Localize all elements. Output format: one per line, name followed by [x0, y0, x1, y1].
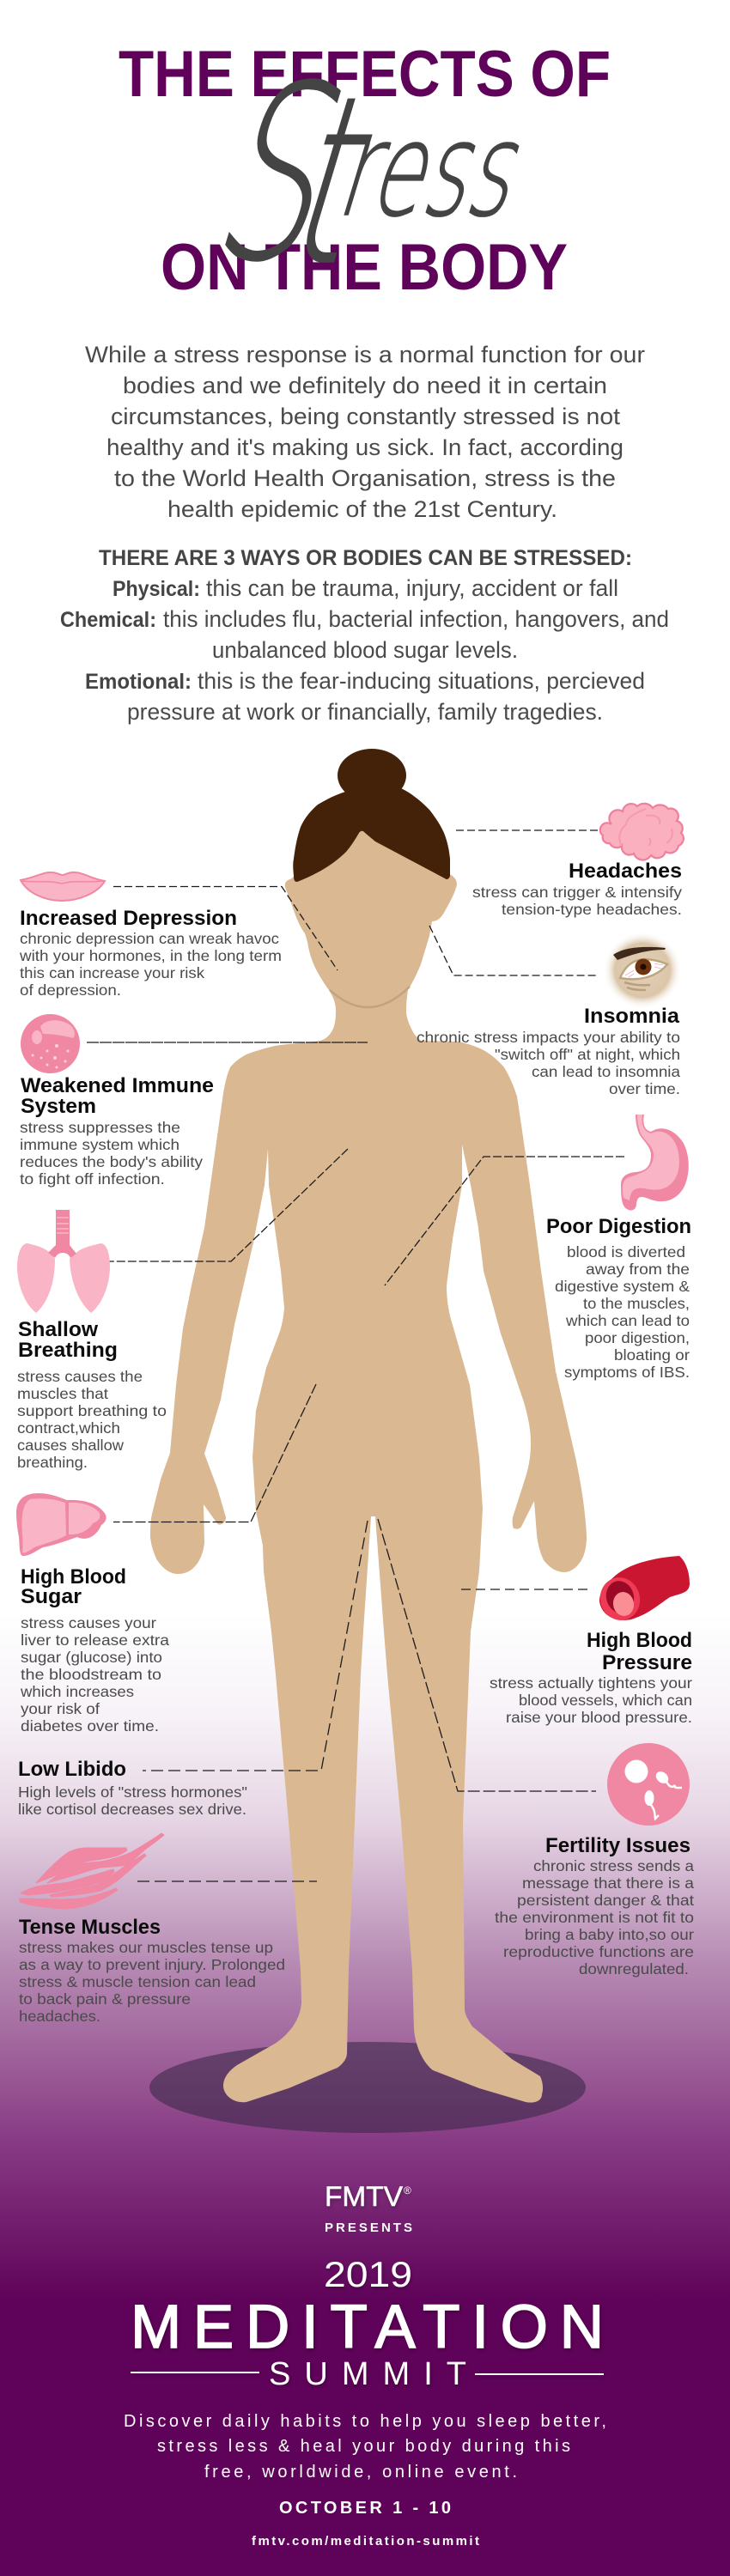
description: blood is diverted [567, 1243, 685, 1261]
title: ress [325, 95, 542, 246]
FMTV logo: FMTV [325, 2181, 404, 2212]
description: like cortisol decreases sex drive. [18, 1801, 246, 1818]
three ways of stress: this includes flu, bacterial infection, hangovers, and [163, 606, 669, 632]
description: digestive system & [555, 1278, 690, 1295]
intro paragraph [85, 342, 645, 522]
icon: lips [21, 872, 105, 901]
description: contract,which [17, 1419, 120, 1437]
description: stress can trigger & intensify [472, 884, 682, 901]
panel: low libido [18, 1758, 247, 1818]
panel: tense muscles [19, 1833, 285, 2025]
description [20, 1119, 203, 1188]
intro paragraph: circumstances, being constantly stressed is not [111, 404, 621, 429]
description: liver to release extra [21, 1631, 169, 1649]
hair [293, 749, 450, 882]
description: stress causes your [21, 1614, 156, 1631]
intro paragraph: health epidemic of the 21st Century. [167, 496, 557, 522]
heading [18, 1318, 118, 1362]
event description [124, 2412, 606, 2482]
description: stress causes the [17, 1368, 143, 1385]
panel: fertility issues [495, 1743, 694, 1978]
website url: fmtv.com/meditation-summit [252, 2534, 479, 2549]
description: sugar (glucose) into [21, 1649, 162, 1666]
description: the environment is not fit to [495, 1909, 694, 1926]
heading: Headaches [569, 860, 682, 883]
heading: Fertility Issues [545, 1834, 690, 1857]
title [119, 35, 611, 317]
summit logo: SUMMIT [269, 2356, 466, 2392]
icon: lungs [17, 1210, 110, 1313]
description: bloating or [614, 1346, 690, 1364]
description: headaches. [19, 2008, 100, 2025]
description: downregulated. [579, 1960, 689, 1978]
icon: brain [600, 804, 684, 860]
heading: Shallow [18, 1318, 98, 1341]
description: support breathing to [17, 1402, 167, 1419]
icon: immune cell [21, 1014, 80, 1073]
icon: egg and sperm [607, 1743, 690, 1826]
heading [21, 1074, 214, 1118]
dashed leader lines [87, 830, 624, 1881]
description: away from the [586, 1261, 690, 1278]
icon: artery [595, 1556, 690, 1625]
description: reproductive functions are [503, 1943, 694, 1960]
description [555, 1243, 690, 1381]
intro paragraph: While a stress response is a normal function for our [85, 342, 645, 368]
presents: PRESENTS [325, 2221, 412, 2235]
heading: Increased Depression [20, 907, 237, 930]
three ways of stress: this is the fear-inducing situations, percieved [198, 668, 645, 694]
description: stress & muscle tension can lead [19, 1973, 256, 1990]
description: over time. [609, 1080, 680, 1097]
panel: meditation summit promo [124, 2181, 606, 2549]
panel: high blood pressure [490, 1556, 692, 1726]
heading: High Blood [21, 1565, 126, 1589]
three ways of stress: THERE ARE 3 WAYS OR BODIES CAN BE STRESSED: [99, 546, 632, 570]
heading: Sugar [21, 1585, 82, 1608]
intro paragraph: bodies and we definitely do need it in certain [123, 373, 607, 398]
description: stress suppresses the [20, 1119, 180, 1136]
event description: stress less & heal your body during this [157, 2437, 570, 2456]
heading: Weakened Immune [21, 1074, 214, 1097]
description: blood vessels, which can [519, 1692, 692, 1709]
description [417, 1029, 680, 1097]
icon: eye [603, 932, 682, 1009]
description: stress actually tightens your [490, 1674, 692, 1692]
summit logo: 2019 [324, 2254, 412, 2294]
panel: insomnia [417, 932, 682, 1097]
three ways of stress: this can be trauma, injury, accident or fall [206, 575, 618, 601]
heading: Low Libido [18, 1758, 126, 1781]
panel: shallow breathing [17, 1210, 167, 1471]
description [20, 1614, 169, 1735]
intro paragraph: healthy and it's making us sick. In fact, according [106, 434, 624, 460]
three ways of stress: Chemical: [60, 608, 156, 632]
icon: liver [16, 1493, 106, 1556]
icon: stomach [621, 1115, 689, 1211]
description: which can lead to [565, 1312, 690, 1329]
title: THE EFFECTS OF [119, 38, 611, 111]
description: raise your blood pressure. [506, 1709, 692, 1726]
description: to the muscles, [583, 1295, 690, 1312]
description: breathing. [17, 1454, 88, 1471]
description: chronic stress sends a [533, 1857, 694, 1874]
description: High levels of "stress hormones" [18, 1783, 247, 1801]
description: chronic depression can wreak havoc [20, 930, 279, 947]
body figure [150, 824, 587, 2103]
panel: weakened immune system [20, 1014, 214, 1188]
description: tension-type headaches. [502, 901, 682, 918]
three ways of stress: unbalanced blood sugar levels. [212, 637, 518, 663]
title: S [191, 35, 374, 315]
description: to back pain & pressure [19, 1990, 191, 2008]
description [472, 884, 682, 918]
description: "switch off" at night, which [495, 1046, 680, 1063]
description: this can increase your risk [20, 964, 204, 981]
description: of depression. [20, 981, 121, 999]
description: diabetes over time. [21, 1717, 159, 1735]
event description: free, worldwide, online event. [204, 2463, 517, 2482]
description: reduces the body's ability [20, 1153, 203, 1170]
description: your risk of [21, 1700, 100, 1717]
description: as a way to prevent injury. Prolonged [19, 1956, 285, 1973]
panel: headaches [472, 804, 684, 918]
summit logo [131, 2254, 604, 2392]
three ways of stress [60, 546, 669, 725]
description: muscles that [17, 1385, 108, 1402]
title: t [265, 47, 405, 317]
heading: System [21, 1095, 96, 1118]
event description: Discover daily habits to help you sleep better, [124, 2412, 606, 2431]
description: the bloodstream to [21, 1666, 161, 1683]
heading: Insomnia [584, 1005, 680, 1028]
description: persistent danger & that [517, 1892, 694, 1909]
heading [587, 1629, 692, 1674]
heading: Breathing [18, 1339, 118, 1362]
heading: Pressure [602, 1651, 692, 1674]
description: message that there is a [522, 1874, 694, 1892]
description: symptoms of IBS. [564, 1364, 690, 1381]
event date: OCTOBER 1 - 10 [279, 2499, 451, 2518]
description: bring a baby into,so our [525, 1926, 694, 1943]
description: poor digestion, [585, 1329, 690, 1346]
three ways of stress: pressure at work or financially, family tragedies. [127, 699, 603, 725]
heading: Tense Muscles [19, 1916, 161, 1939]
description: chronic stress impacts your ability to [417, 1029, 680, 1046]
heading: Poor Digestion [546, 1215, 691, 1238]
heading [21, 1565, 126, 1608]
panel: increased depression [19, 872, 282, 999]
description [17, 1368, 167, 1471]
description [19, 1939, 285, 2025]
three ways of stress: Emotional: [85, 670, 192, 694]
panel: high blood sugar [16, 1493, 169, 1735]
title: ON THE BODY [161, 231, 568, 304]
description [490, 1674, 692, 1726]
panel: poor digestion [546, 1115, 691, 1381]
intro paragraph: to the World Health Organisation, stress is the [114, 465, 616, 491]
FMTV logo: ® [404, 2184, 411, 2196]
description [495, 1857, 694, 1978]
heading: High Blood [587, 1629, 692, 1652]
description [19, 930, 282, 999]
description: with your hormones, in the long term [19, 947, 282, 964]
floor shadow [149, 2042, 586, 2133]
description: immune system which [20, 1136, 179, 1153]
description: causes shallow [17, 1437, 124, 1454]
description: to fight off infection. [20, 1170, 165, 1188]
description: can lead to insomnia [532, 1063, 680, 1080]
description: which increases [20, 1683, 134, 1700]
description: stress makes our muscles tense up [19, 1939, 273, 1956]
description [18, 1783, 247, 1818]
summit logo: MEDITATION [131, 2293, 604, 2361]
icon: muscle [20, 1833, 164, 1909]
three ways of stress: Physical: [113, 577, 200, 601]
